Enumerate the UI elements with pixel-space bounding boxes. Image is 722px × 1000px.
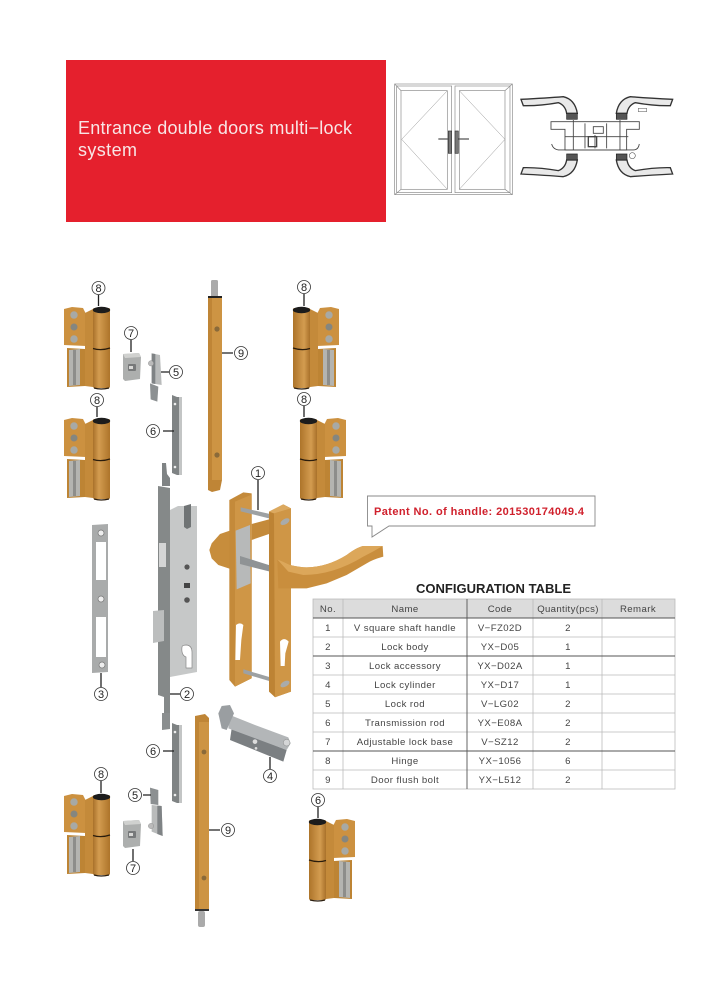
part number callouts: 7 bbox=[130, 863, 136, 875]
icon: flush bolt top bbox=[208, 280, 222, 492]
icon: hinge top right bbox=[293, 307, 339, 389]
part number callouts bbox=[90, 280, 324, 875]
title: system bbox=[78, 140, 137, 160]
part number callouts: 8 bbox=[301, 394, 307, 406]
table: configuration table: YX−D17 bbox=[481, 680, 519, 691]
table: configuration table: Transmission rod bbox=[365, 718, 445, 729]
table: configuration table: Lock rod bbox=[385, 699, 425, 710]
table: configuration table: 6 bbox=[565, 756, 571, 767]
part number callouts: 3 bbox=[98, 689, 104, 701]
icon: hinge second left bbox=[64, 418, 110, 500]
icon: hinge second right bbox=[300, 418, 346, 500]
icon: hinge bottom right bbox=[309, 819, 355, 901]
front lever bbox=[277, 546, 383, 588]
table: configuration table: Lock accessory bbox=[369, 661, 441, 672]
table: configuration table: 1 bbox=[565, 680, 571, 691]
rear handle lever bbox=[252, 519, 269, 540]
part number callouts: 8 bbox=[98, 769, 104, 781]
part number callouts: 6 bbox=[150, 746, 156, 758]
table: configuration table: 1 bbox=[565, 642, 571, 653]
part number callouts: 7 bbox=[128, 328, 134, 340]
table: configuration table: V square shaft handle bbox=[354, 623, 456, 634]
table: configuration table: Hinge bbox=[391, 756, 419, 767]
part number callouts: 9 bbox=[225, 825, 231, 837]
icon: lock cylinder bbox=[218, 705, 291, 762]
front plate bbox=[269, 504, 291, 697]
table: configuration table: Door flush bolt bbox=[371, 775, 439, 786]
part number callouts: 2 bbox=[184, 689, 190, 701]
icon: flush bolt bottom bbox=[195, 714, 209, 927]
part number callouts: 5 bbox=[132, 790, 138, 802]
icon: handle cross-section drawing bbox=[521, 97, 673, 177]
table: configuration table: 1 bbox=[565, 661, 571, 672]
part number callouts: 9 bbox=[238, 348, 244, 360]
part number callouts: 5 bbox=[173, 367, 179, 379]
table: configuration table: 2 bbox=[565, 623, 571, 634]
table: configuration table: 2 bbox=[565, 699, 571, 710]
table: configuration table: 5 bbox=[325, 699, 331, 710]
heading: configuration table: CONFIGURATION TABLE bbox=[416, 581, 571, 596]
table: configuration table: YX−D05 bbox=[481, 642, 519, 653]
part number callouts: 6 bbox=[150, 426, 156, 438]
table: configuration table: YX−1056 bbox=[479, 756, 521, 767]
table: configuration table: YX−E08A bbox=[478, 718, 523, 729]
icon: transmission rod bottom bbox=[172, 723, 182, 803]
callout: patent number: Patent No. of handle: 201530174049.4 bbox=[374, 506, 585, 518]
table: configuration table: V−FZ02D bbox=[478, 623, 522, 634]
title bbox=[78, 118, 353, 160]
table: configuration table: 8 bbox=[325, 756, 331, 767]
icon: lock rod bottom bbox=[148, 788, 163, 836]
table: configuration table: 1 bbox=[325, 623, 331, 634]
icon: lock rod top bbox=[148, 353, 162, 402]
callout: patent number bbox=[368, 496, 595, 537]
table: configuration table: 6 bbox=[325, 718, 331, 729]
icon: handle set bbox=[209, 492, 383, 697]
table: configuration table: V−LG02 bbox=[481, 699, 519, 710]
table: configuration table: V−SZ12 bbox=[481, 737, 519, 748]
table: configuration table: Lock body bbox=[381, 642, 429, 653]
table: configuration table: Quantity(pcs) bbox=[537, 604, 599, 615]
part number callouts: 8 bbox=[95, 283, 102, 295]
table: configuration table: Code bbox=[488, 604, 512, 615]
table: configuration table: No. bbox=[320, 604, 336, 615]
table: configuration table: Remark bbox=[620, 604, 656, 615]
part number callouts: 1 bbox=[255, 468, 261, 480]
table: configuration table: 2 bbox=[565, 775, 571, 786]
table: configuration table: Lock cylinder bbox=[374, 680, 436, 691]
table: configuration table: 7 bbox=[325, 737, 331, 748]
table: configuration table: YX−D02A bbox=[477, 661, 523, 672]
rear plate bbox=[229, 492, 252, 687]
icon: adjustable lock base top bbox=[123, 353, 141, 381]
table: configuration table: Name bbox=[391, 604, 419, 615]
icon: lock body bbox=[153, 463, 197, 730]
connecting rods bbox=[241, 507, 270, 681]
table: configuration table: 9 bbox=[325, 775, 331, 786]
table: configuration table: YX−L512 bbox=[479, 775, 521, 786]
table: configuration table: 2 bbox=[565, 737, 571, 748]
panel: red title banner bbox=[66, 60, 386, 222]
table: configuration table: 2 bbox=[565, 718, 571, 729]
part number callouts: 8 bbox=[301, 282, 307, 294]
part number callouts: 4 bbox=[267, 771, 273, 783]
icon: hinge top left bbox=[64, 307, 110, 389]
icon: double door elevation bbox=[395, 84, 512, 195]
table: configuration table: 3 bbox=[325, 661, 331, 672]
table: configuration table: Adjustable lock base bbox=[357, 737, 453, 748]
icon: lock strike plate bbox=[92, 524, 108, 673]
icon: transmission rod top bbox=[172, 395, 182, 475]
part number callouts: 6 bbox=[315, 795, 321, 807]
title: Entrance double doors multi−lock bbox=[78, 118, 353, 138]
part number callouts: 8 bbox=[94, 395, 100, 407]
icon: hinge bottom left bbox=[64, 794, 110, 876]
table: configuration table bbox=[313, 599, 675, 789]
table: configuration table: 4 bbox=[325, 680, 331, 691]
table: configuration table: 2 bbox=[325, 642, 331, 653]
icon: adjustable lock base bottom bbox=[123, 820, 141, 848]
